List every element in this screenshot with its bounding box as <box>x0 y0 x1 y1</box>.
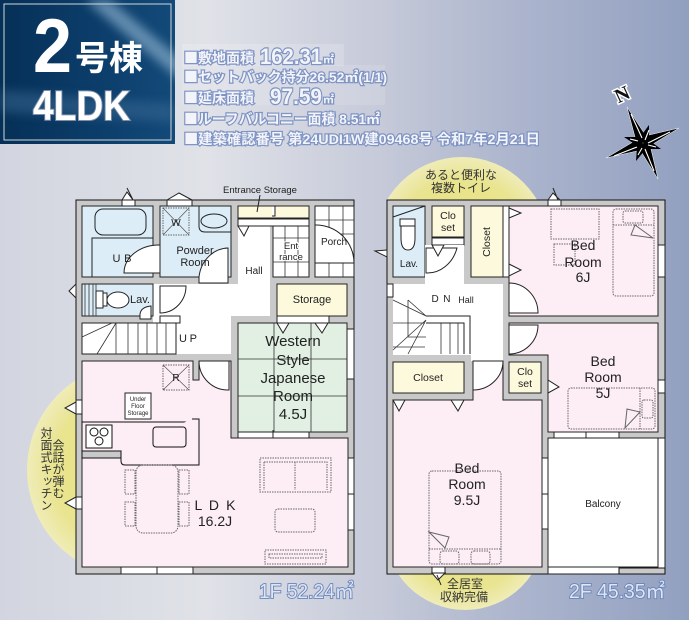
property information list: ■敷地面積 <box>184 48 254 68</box>
room: unit bath <box>82 206 160 277</box>
floor plan: 1F <box>65 188 354 574</box>
room: porch: Porch <box>321 237 347 248</box>
label: 全居室収納完備: 全居室 <box>447 577 483 591</box>
room: bedroom 9.5J <box>393 355 548 567</box>
room: entrance: rance <box>279 252 303 263</box>
room: hall: Hall <box>245 266 263 277</box>
room: western style Japanese room: Style <box>276 352 310 369</box>
room: hall <box>153 219 309 354</box>
callout circle: 対面式キッチン: 会話が弾む <box>51 439 65 499</box>
room: unit bath: U B <box>112 253 132 265</box>
callout circle: 全居室収納完備 <box>398 574 532 610</box>
label: entrance storage: Entrance Storage <box>223 185 297 196</box>
icon: under floor storage: Storage <box>127 411 149 417</box>
property information list: 162.31 <box>260 44 322 69</box>
header badge: 2号棟 4LDK <box>0 0 185 144</box>
room: powder room: Powder <box>176 245 214 257</box>
callout circle: 複数トイレ: 複数トイレ <box>431 180 491 195</box>
room: balcony: Balcony <box>585 499 621 510</box>
room: LDK <box>82 361 354 574</box>
kitchen counter <box>82 419 199 465</box>
room: bedroom 5J: 5J <box>596 385 610 401</box>
room: porch <box>315 206 354 277</box>
room: western style Japanese room: Western <box>265 333 321 350</box>
room: 2F upper closet: set <box>441 222 455 234</box>
room: entrance storage <box>238 206 309 218</box>
area label: 1F: 1F 52.24㎡ <box>259 579 354 603</box>
room: bedroom 5J: Room <box>584 369 622 385</box>
room: 2F long closet <box>471 206 503 277</box>
property information list: ■ルーフバルコニー面積 8.51㎡ <box>184 109 380 129</box>
room: bedroom 6J: Bed <box>571 237 595 253</box>
header badge: 2号棟 4LDK: 号棟 <box>75 40 143 78</box>
room: storage: Storage <box>293 294 331 306</box>
room: LDK: 16.2J <box>198 513 232 529</box>
room: lower small closet: Clo <box>517 366 533 378</box>
callout circle: 複数トイレ: あると便利な <box>425 168 497 182</box>
room: powder room <box>160 206 231 283</box>
callout circle: 複数トイレ <box>387 157 537 200</box>
furniture: dining set <box>125 465 189 533</box>
area label: 2F: 2F 45.35㎡ <box>569 579 665 603</box>
property information list: ■延床面積 <box>184 88 254 108</box>
room: bedroom 6J: 6J <box>576 269 590 285</box>
room: entrance: Ent <box>284 241 298 252</box>
room: 2F lavatory <box>393 206 425 277</box>
icon: compass <box>606 82 679 179</box>
icon: under floor storage: Floor <box>131 404 145 410</box>
room: bedroom 5J <box>509 323 665 438</box>
room: lavatory: Lav. <box>130 294 150 306</box>
room: 2F lavatory: Lav. <box>400 259 418 270</box>
room: bedroom 6J: Room <box>564 254 602 270</box>
room: bedroom 5J: Bed <box>591 353 615 369</box>
header badge: 2号棟 4LDK: 2 <box>33 4 72 89</box>
room: western style Japanese room <box>238 316 354 438</box>
room: bedroom 9.5J: 9.5J <box>454 492 480 508</box>
wall vents <box>375 188 561 580</box>
property information list: ㎡ <box>323 53 334 66</box>
room: bedroom 6J <box>503 206 665 316</box>
furniture: sofa and table <box>260 458 331 564</box>
callout circle: 対面式キッチン: 対面式キッチン <box>39 427 53 511</box>
property information list: ■建築確認番号 第24UDI1W建09468号 令和7年2月21日 <box>184 129 540 149</box>
room: bedroom 9.5J: Bed <box>455 460 479 476</box>
property information list: ㎡ <box>323 93 334 106</box>
room: lower small closet: set <box>518 378 532 390</box>
room: western style Japanese room: Room <box>273 388 313 405</box>
property information list: ■セットバック持分26.52㎡(1/1) <box>184 67 387 87</box>
label: 全居室収納完備 <box>437 575 488 604</box>
room: balcony <box>548 438 665 574</box>
icon: compass: N <box>611 82 634 108</box>
room: western style Japanese room: Japanese <box>260 370 326 387</box>
room: 2F long closet: Closet <box>481 227 493 257</box>
callout circle: 対面式キッチン <box>27 380 76 560</box>
label: entrance storage <box>223 185 297 216</box>
room: LDK: L D K <box>194 497 236 513</box>
room: 2F upper closet <box>432 206 464 245</box>
label: 全居室収納完備: 収納完備 <box>440 589 488 604</box>
room: lower closet: Closet <box>413 372 443 384</box>
property information list: 97.59 <box>270 84 322 109</box>
stairs <box>82 323 176 354</box>
room: western style Japanese room: 4.5J <box>279 406 307 423</box>
room: hall: U P <box>179 333 197 345</box>
icon: under floor storage <box>125 393 151 419</box>
room: 2F upper closet: Clo <box>440 210 456 222</box>
property information list <box>182 44 540 149</box>
floor plan: 2F <box>375 188 665 580</box>
room: 2F hall and stairs: Hall <box>458 295 474 305</box>
room: entrance <box>273 226 309 277</box>
room: powder room: W <box>171 218 181 229</box>
room: storage <box>277 284 347 316</box>
room: 2F hall and stairs <box>387 245 503 355</box>
room: 2F hall and stairs: D N <box>432 294 450 305</box>
room: lavatory <box>82 284 153 319</box>
room: lower closet <box>393 362 464 393</box>
wall windows and vents <box>65 188 192 509</box>
header badge: 2号棟 4LDK: 4LDK <box>33 82 130 129</box>
room: powder room: Room <box>180 257 210 269</box>
room: bedroom 9.5J: Room <box>448 476 486 492</box>
room: LDK: R <box>172 373 180 384</box>
room: lower small closet <box>509 362 541 393</box>
icon: under floor storage: Under <box>130 397 146 403</box>
